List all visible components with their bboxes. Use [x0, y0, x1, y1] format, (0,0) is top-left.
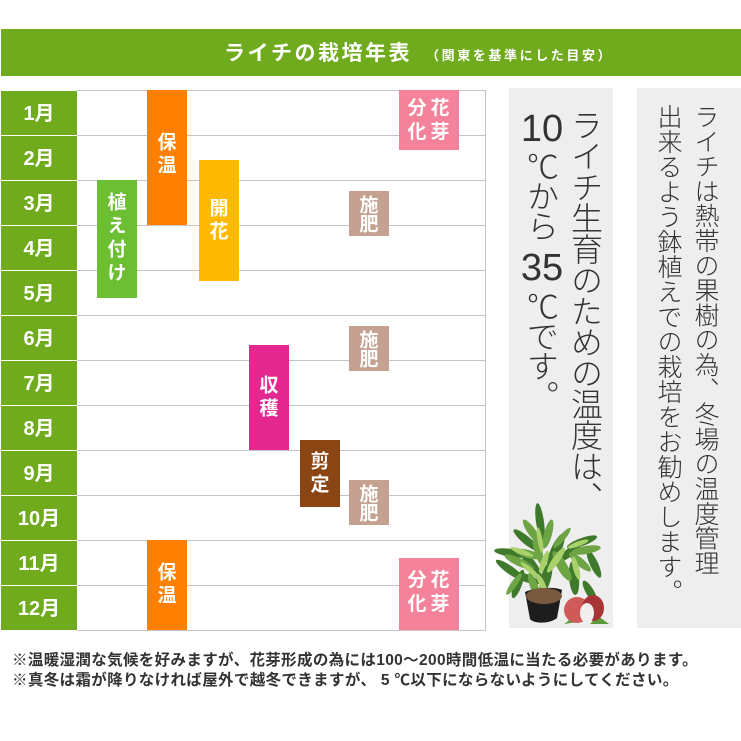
month label: December: 12月	[18, 598, 60, 620]
month label: March: 3月	[23, 193, 55, 215]
bar: fertilizing, June	[349, 326, 389, 371]
month label: May	[1, 271, 77, 315]
month label: August: 8月	[23, 418, 55, 440]
panel: cultivation advice	[637, 88, 741, 628]
month label: April	[1, 226, 77, 270]
bar: keep warm, winter to spring	[147, 90, 187, 225]
month label: July: 7月	[23, 373, 55, 395]
bar: fertilizing, October: 施肥	[356, 484, 378, 522]
bar: keep warm, November to December	[147, 540, 187, 630]
bar: flower bud differentiation, winter	[399, 558, 459, 630]
month label: May: 5月	[23, 283, 55, 305]
bar: pruning: 剪定	[308, 450, 328, 496]
plant pot	[525, 588, 562, 623]
footnotes	[12, 652, 698, 689]
bar: flowering	[199, 160, 239, 281]
subtitle: （関東を基準にした目安）	[426, 48, 613, 63]
plant leaves	[494, 503, 604, 605]
bar: pruning	[300, 440, 340, 507]
title banner	[1, 29, 741, 76]
month label: February	[1, 136, 77, 180]
month label: June: 6月	[23, 328, 55, 350]
month label: September: 9月	[23, 463, 55, 485]
month label: March	[1, 181, 77, 225]
text: 10: 10	[521, 108, 563, 150]
month label: January: 1月	[23, 103, 55, 125]
month label: November	[1, 541, 77, 585]
month label: April: 4月	[23, 238, 55, 260]
bar: keep warm, winter to spring: 保温	[154, 132, 176, 178]
bar: flower bud differentiation, winter: 分花	[407, 570, 454, 591]
text: degrees ending: ℃です。	[523, 290, 559, 410]
month label: December	[1, 586, 77, 630]
text: degrees from: ℃から	[523, 150, 559, 240]
text: advice line two: 出来るよう鉢植えでの栽培をお勧めします。	[654, 104, 682, 604]
month label: July	[1, 361, 77, 405]
bar: flower bud differentiation, spring	[399, 90, 459, 150]
note: overwintering: ※真冬は霜が降りなければ屋外で越冬できますが、 5 ℃以下にならないようにしてください。	[12, 672, 679, 689]
bar: planting: 植え付け	[104, 192, 126, 286]
chart: cultivation calendar	[1, 90, 486, 631]
month label: September	[1, 451, 77, 495]
image: potted lychee plant and fruit	[494, 503, 609, 624]
bar: harvest: 収穫	[256, 374, 278, 420]
bar: flower bud differentiation, winter: 化芽	[407, 594, 454, 615]
text: first line: ライチ生育のための温度は、	[567, 109, 603, 512]
month label: June	[1, 316, 77, 360]
lychee fruit	[564, 595, 609, 624]
title: ライチの栽培年表	[224, 42, 412, 65]
month label: November: 11月	[18, 553, 60, 575]
bar: planting	[97, 180, 137, 298]
text: advice line one: ライチは熱帯の果樹の為、冬場の温度管理	[691, 104, 719, 575]
bar: fertilizing, June: 施肥	[356, 330, 378, 368]
month label: August	[1, 406, 77, 450]
text: 35: 35	[521, 247, 563, 289]
bar: keep warm, November to December: 保温	[154, 562, 176, 608]
bar: harvest	[249, 345, 289, 450]
month label: February: 2月	[23, 148, 55, 170]
note: low temperature requirement: ※温暖湿潤な気候を好みますが、花芽形成の為には100～200時間低温に当たる必要があります。	[12, 652, 698, 669]
month label: October: 10月	[18, 508, 60, 530]
bar: fertilizing, March: 施肥	[356, 194, 378, 232]
month label: October	[1, 496, 77, 540]
bar: fertilizing, March	[349, 191, 389, 236]
bar: flowering: 開花	[206, 198, 228, 244]
bar: flower bud differentiation, spring: 分花	[407, 98, 454, 119]
bar: flower bud differentiation, spring: 化芽	[407, 122, 454, 143]
month label: January	[1, 91, 77, 135]
bar: fertilizing, October	[349, 480, 389, 525]
panel: growing temperature	[509, 88, 613, 628]
